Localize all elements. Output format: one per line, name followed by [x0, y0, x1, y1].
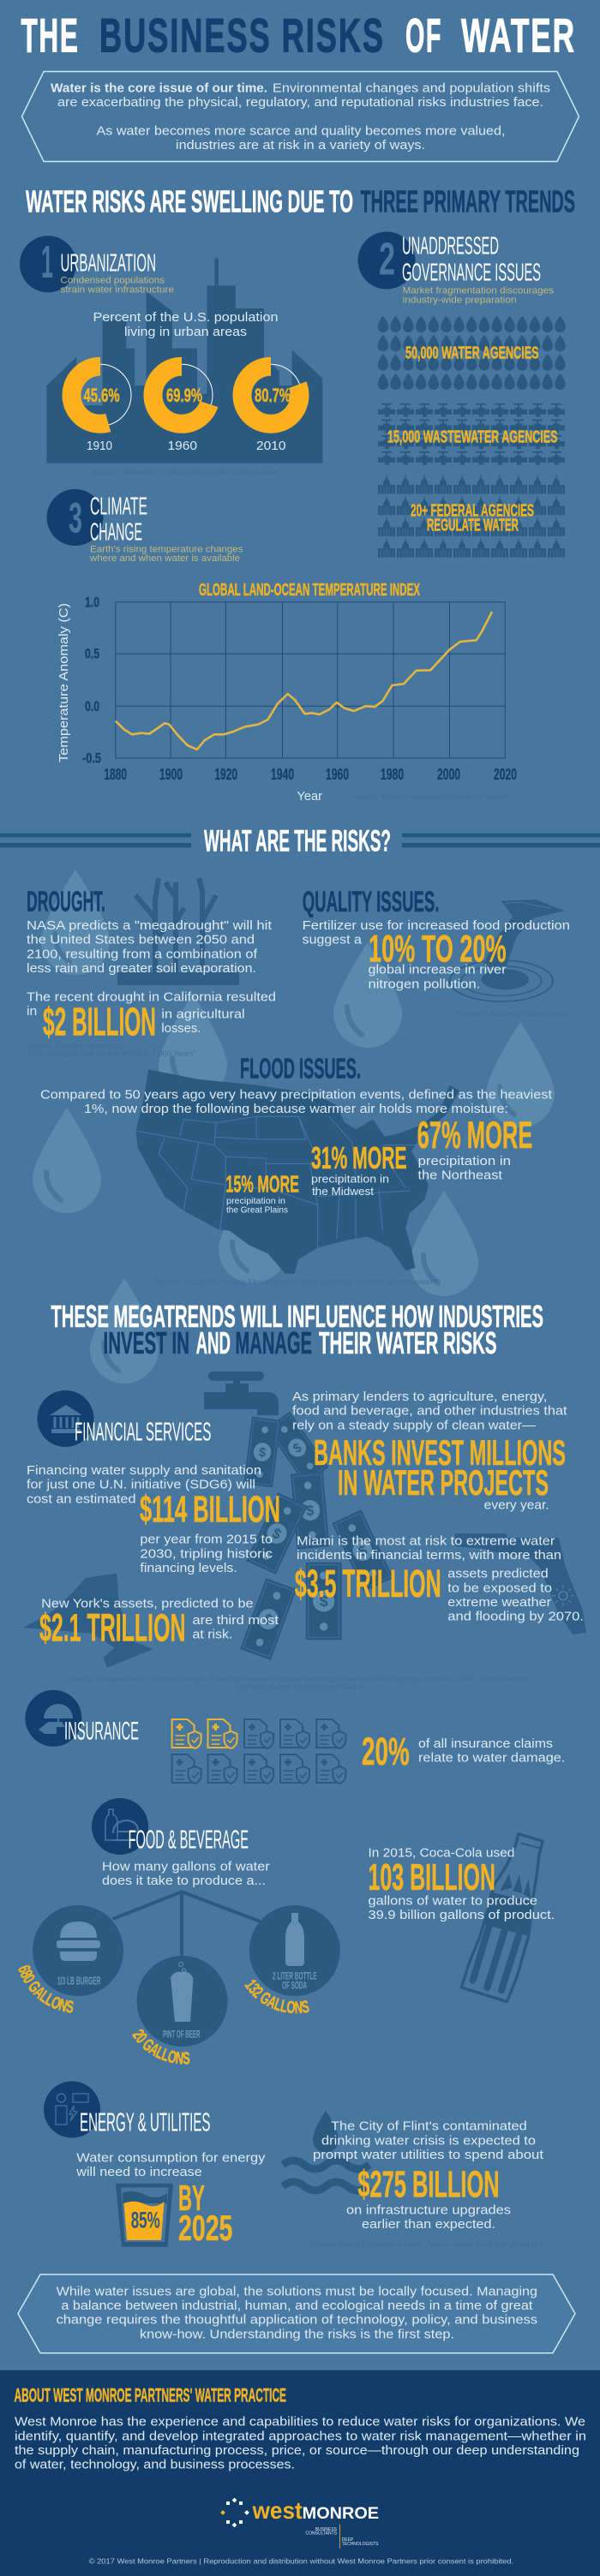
icon: cola bottle	[461, 1834, 543, 2002]
panel: energy and utilities: Water consumption for energy	[76, 2151, 266, 2165]
text: banks invest millions: rely on a steady supply of clean water—	[292, 1419, 537, 1432]
stat: 31% midwest: precipitation in	[311, 1174, 389, 1186]
title: OF	[405, 9, 442, 62]
panel: quality issues: QUALITY ISSUES.	[303, 886, 439, 918]
panel: energy and utilities	[44, 2082, 266, 2179]
chart: global land-ocean temperature index: 1900	[159, 765, 183, 783]
panel: trend 1 urbanization: Condensed populations	[60, 276, 165, 286]
heading: what are the risks: WHAT ARE THE RISKS?	[204, 824, 391, 858]
icon: falling money: $	[356, 1542, 369, 1560]
stat: by 2025	[178, 2178, 232, 2248]
title: BUSINESS RISKS	[99, 9, 385, 62]
panel: drought: in agricultural	[161, 1007, 245, 1021]
text: Miami: Miami is the most at risk to extreme water	[297, 1534, 555, 1548]
icon: faucet	[204, 1372, 279, 1415]
icon: falling money: $	[305, 1502, 315, 1519]
text: Miami: incidents in financial terms, with more than	[297, 1549, 561, 1563]
text: New York: at risk.	[192, 1629, 232, 1642]
stat: 67% northeast: the Northeast	[418, 1169, 502, 1183]
panel: drought: the United States between 2050 and	[27, 934, 255, 947]
icon: falling money: $	[258, 1446, 267, 1461]
heading: three primary trends: WATER RISKS ARE SWELLING DUE TO	[26, 184, 353, 219]
panel: drought: The recent drought in California resulted	[27, 990, 276, 1004]
text: Flint: drinking water crisis is expected to	[321, 2134, 536, 2148]
panel: financial services: FINANCIAL SERVICES	[75, 1418, 211, 1447]
item: soda: 132 GALLONS	[244, 1979, 309, 2013]
stat: 15% great plains	[225, 1171, 299, 1216]
chart: global land-ocean temperature index: 1.0	[85, 594, 99, 610]
connector lines	[113, 1892, 261, 1957]
chart: donut 1960	[151, 364, 213, 453]
panel: financial services: per year from 2015 to	[140, 1533, 273, 1547]
chart: donut 1960: 1960	[168, 439, 197, 453]
chart: global land-ocean temperature index: Temperature Anomaly (C)	[57, 603, 71, 762]
stat: 67% northeast	[417, 1115, 532, 1183]
item: soda: OF SODA	[282, 1980, 307, 1992]
icon: dead trees	[117, 878, 239, 985]
text: Coca-Cola: In 2015, Coca-Cola used	[369, 1846, 514, 1860]
panel: drought: "U.S. Droughts Will Be the Worst in 1,000 Years"	[27, 1049, 196, 1057]
panel: flood issues: Compared to 50 years ago very heavy precipitation events, defined as the heaviest	[40, 1088, 552, 1102]
heading: what are the risks	[0, 824, 600, 858]
chart: donut 1960: 69.9%	[166, 385, 202, 406]
stat: by 2025: 2025	[178, 2208, 232, 2248]
icon: Florida	[455, 1533, 586, 1635]
text: Flint: Source: World Economic Forum, "Water crises are a top global risk"	[309, 2240, 548, 2248]
panel: insurance	[25, 1690, 139, 1747]
text: Flint: prompt water utilities to spend about	[313, 2149, 543, 2162]
text: Flint	[309, 2120, 548, 2248]
panel: trend 2 governance: 2	[379, 234, 395, 285]
source: financial	[67, 1676, 531, 1691]
panel: closing hexagon: change requires the thoughtful application of technology, policy, and business	[57, 2314, 537, 2328]
panel: intro hexagon: As water becomes more scarce and quality becomes more valued,	[96, 124, 506, 138]
panel: financial services: $114 BILLION	[140, 1489, 280, 1530]
text: Miami	[295, 1534, 584, 1624]
heading: megatrends: INVEST IN	[103, 1325, 189, 1360]
panel: financial services	[27, 1390, 280, 1575]
panel: food and beverage heading	[92, 1798, 270, 1888]
text: banks invest millions: As primary lenders to agriculture, energy,	[292, 1390, 547, 1404]
stat: 15% great plains: precipitation in	[226, 1197, 285, 1206]
chart: global land-ocean temperature index: -0.5	[82, 750, 101, 767]
panel: closing hexagon: know-how. Understanding the risks is the first step.	[140, 2328, 454, 2341]
chart: global land-ocean temperature index	[57, 580, 517, 804]
chart: global land-ocean temperature index: 1920	[214, 765, 237, 783]
icon: falling money: $	[270, 1525, 284, 1543]
panel: flood issues: 1%, now drop the following because warmer air holds more moisture:	[84, 1103, 508, 1116]
text: INSURANCE	[64, 1718, 139, 1746]
icon: water drop and waves	[283, 2111, 369, 2190]
icon: falling money: $	[291, 1441, 305, 1456]
text: New York: $2.1 TRILLION	[39, 1606, 186, 1650]
text: Coca-Cola: 39.9 billion gallons of product.	[369, 1909, 555, 1922]
chart: global land-ocean temperature index: 2020	[494, 765, 517, 783]
panel: financial services: Financing water supply and sanitation	[27, 1464, 261, 1478]
title: THE	[21, 9, 79, 62]
text: Flint: on infrastructure upgrades	[346, 2203, 511, 2217]
logo: West Monroe	[220, 2497, 379, 2549]
panel: food and beverage heading: FOOD & BEVERAGE	[129, 1826, 249, 1855]
item: soda	[244, 1905, 340, 2013]
panel: drought: Source: Scientific American,	[27, 1042, 123, 1049]
panel: financial services: cost an estimated	[27, 1492, 135, 1506]
stat: 67% northeast: precipitation in	[418, 1155, 511, 1168]
text: New York: are third most	[192, 1614, 279, 1628]
panel: intro hexagon: are exacerbating the physical, regulatory, and reputational risks industries face.	[57, 96, 543, 110]
panel: trend 2 governance	[358, 231, 555, 305]
icon grid: wastewater agencies	[378, 403, 567, 465]
chart: donut 2010: 80.7%	[255, 385, 291, 406]
icon: falling money: $	[261, 1611, 274, 1629]
item: beer	[132, 1956, 228, 2065]
stat: 31% midwest: the Midwest	[312, 1186, 375, 1198]
text: Flint: earlier than expected.	[362, 2218, 495, 2232]
panel: drought: NASA predicts a "megadrought" will hit	[27, 919, 272, 933]
text: percent of population: living in urban areas	[124, 326, 247, 339]
stat: 20% insurance claims: of all insurance claims	[418, 1737, 553, 1751]
heading: megatrends: MANAGE	[235, 1325, 312, 1360]
chart: donut 1910: 1910	[87, 439, 112, 453]
text: percent of population: Percent of the U.S. population	[93, 311, 278, 325]
panel: flood issues	[40, 1053, 552, 1116]
panel: intro hexagon: Water is the core issue of our time.	[51, 82, 267, 96]
icon grid: water agencies	[378, 316, 567, 391]
panel: food and beverage heading: How many gallons of water	[102, 1860, 270, 1874]
text: Coca-Cola: gallons of water to produce	[369, 1894, 537, 1908]
logo: West Monroe: TECHNOLOGISTS	[342, 2542, 379, 2547]
panel: financial services: financing levels.	[140, 1562, 237, 1575]
heading: megatrends	[51, 1299, 543, 1360]
stat: by 2025: BY	[178, 2178, 205, 2218]
copyright: © 2017 West Monroe Partners | Reproduction and distribution without West Monroe Partners prior consent is prohibited.	[89, 2557, 513, 2566]
panel: quality issues: suggest a	[303, 934, 363, 947]
panel: about West Monroe: identify, quantify, and develop integrated approaches to water risk management—whether in	[15, 2430, 586, 2443]
text: banks invest millions	[292, 1390, 567, 1513]
text: banks invest millions: food and beverage, and other industries that	[292, 1405, 567, 1419]
chart: global land-ocean temperature index: 2000	[437, 765, 460, 783]
item: burger: 680 GALLONS	[19, 1965, 74, 2013]
panel: trend 3 climate: CLIMATE	[90, 493, 147, 520]
panel: about West Monroe: West Monroe has the experience and capabilities to reduce water risks for organizations. We	[15, 2416, 585, 2430]
icon: glass 85%	[116, 2184, 173, 2247]
item: burger	[19, 1905, 123, 2013]
source: financial: and Sustainable Development Goal 6.	[235, 1683, 365, 1691]
panel: quality issues: global increase in river	[369, 964, 507, 977]
text: Miami: to be exposed to	[447, 1581, 552, 1595]
icon: New York	[23, 1574, 153, 1668]
panel: drought: $2 BILLION	[43, 999, 156, 1043]
panel: closing hexagon: a balance between industrial, human, and ecological needs in a time of great	[61, 2299, 532, 2313]
panel: financial services: for just one U.N. initiative (SDG6) will	[27, 1479, 255, 1492]
panel: drought: in	[27, 1005, 37, 1019]
panel: quality issues: nitrogen pollution.	[369, 977, 480, 991]
chart: global land-ocean temperature index: 1960	[326, 765, 349, 783]
text: banks invest millions: every year.	[484, 1499, 549, 1513]
panel: quality issues: Source: UN-Water, "Water Facts"	[457, 1011, 570, 1019]
panel: quality issues	[303, 886, 570, 1019]
chart: global land-ocean temperature index: 1880	[104, 765, 127, 783]
chart: global land-ocean temperature index: 0.0	[85, 698, 99, 714]
icon grid: federal agencies	[378, 475, 567, 558]
chart: global land-ocean temperature index: 1940	[271, 765, 294, 783]
chart: donut 2010: 2010	[256, 439, 286, 453]
panel: trend 2 governance: industry-wide preparation	[403, 295, 517, 305]
icon: falling money: $	[320, 1593, 328, 1610]
panel: closing hexagon	[18, 2274, 575, 2353]
panel: trend 3 climate: where and when water is available	[89, 553, 240, 564]
panel: flood issues: FLOOD ISSUES.	[240, 1053, 361, 1085]
icon: glass 85%: 85%	[131, 2208, 160, 2233]
panel: financial services: 2030, tripling historic	[140, 1547, 273, 1561]
chart: global land-ocean temperature index: Year	[297, 790, 322, 804]
panel: trend 3 climate: Earth's rising temperature changes	[90, 544, 243, 554]
text: New York: New York's assets, predicted to be	[41, 1598, 254, 1611]
text: percent of population	[93, 311, 278, 339]
icon: city skyline	[46, 259, 322, 463]
panel: drought: 2100, resulting from a combination of	[27, 947, 258, 961]
stat: 20% insurance claims: 20%	[362, 1730, 410, 1773]
item: burger: 1/3 LB BURGER	[57, 1975, 100, 1987]
logo: West Monroe: west	[252, 2497, 303, 2524]
panel: trend 1 urbanization	[20, 236, 174, 295]
panel: trend 3 climate: CHANGE	[90, 519, 142, 547]
chart: global land-ocean temperature index: 0.5	[85, 645, 99, 661]
chart: global land-ocean temperature index: 1980	[381, 765, 404, 783]
icon grid: insurance claims	[172, 1719, 345, 1784]
text: Miami: assets predicted	[447, 1568, 549, 1581]
panel: about West Monroe	[0, 2370, 600, 2576]
text: Coca-Cola	[369, 1846, 555, 1922]
background water drops	[33, 870, 555, 1384]
panel: trend 1 urbanization: 1	[41, 236, 53, 288]
heading: megatrends: AND	[196, 1325, 231, 1360]
logo: West Monroe: DEEP	[342, 2537, 354, 2543]
text: Miami: $3.5 TRILLION	[295, 1562, 441, 1605]
panel: intro hexagon: Environmental changes and population shifts	[273, 82, 550, 96]
panel: energy and utilities: will need to increase	[75, 2166, 202, 2179]
item: soda: 2 LITER BOTTLE	[273, 1970, 317, 1982]
chart: global land-ocean temperature index: Source: NASA's Goddard Institute for Space	[352, 793, 508, 801]
chart: donut 1910	[69, 364, 131, 453]
panel: trend 3 climate	[46, 489, 243, 564]
panel: about West Monroe: the supply chain, manufacturing process, price, or source—through our deep understanding	[15, 2444, 579, 2458]
panel: closing hexagon: While water issues are global, the solutions must be locally focused. Managing	[57, 2285, 537, 2298]
map: United States	[135, 1069, 459, 1274]
panel: drought: DROUGHT.	[27, 886, 105, 917]
item: beer: PINT OF BEER	[163, 2028, 201, 2040]
panel: energy and utilities: ENERGY & UTILITIES	[80, 2108, 211, 2137]
chart: donut 1910: 45.6%	[84, 385, 120, 406]
panel: trend 2 governance: Market fragmentation discourages	[403, 286, 555, 296]
stat: 15% great plains: 15% MORE	[225, 1171, 299, 1198]
text: Flint: $275 BILLION	[357, 2164, 500, 2205]
panel: intro hexagon: industries are at risk in a variety of ways.	[176, 139, 425, 152]
panel: about West Monroe: of water, technology, and business processes.	[15, 2459, 295, 2472]
icon grid: federal agencies: REGULATE WATER	[427, 515, 519, 535]
panel: intro hexagon	[22, 72, 579, 161]
panel: drought: losses.	[161, 1022, 201, 1036]
icon: polluted pipe	[450, 900, 564, 1001]
text: Coca-Cola: 103 BILLION	[369, 1857, 495, 1898]
logo: West Monroe: MONROE	[303, 2505, 379, 2523]
logo: West Monroe: CONSULTANTS	[306, 2531, 338, 2537]
panel: drought	[27, 886, 276, 1057]
item: beer: 20 GALLONS	[132, 2029, 190, 2065]
panel: trend 1 urbanization: strain water infrastructure	[60, 284, 174, 295]
icon: falling money	[240, 1412, 393, 1660]
chart: donut 2010	[240, 364, 302, 453]
stat: 20% insurance claims	[362, 1730, 565, 1773]
text: Miami: and flooding by 2070.	[447, 1611, 584, 1624]
panel: food and beverage heading: does it take to produce a...	[102, 1874, 266, 1888]
panel: trend 2 governance: UNADDRESSED	[402, 233, 499, 260]
stat: 20% insurance claims: relate to water damage.	[418, 1752, 565, 1766]
text: Flint: The City of Flint's contaminated	[331, 2120, 527, 2134]
chart: global land-ocean temperature index: GLOBAL LAND-OCEAN TEMPERATURE INDEX	[199, 580, 420, 600]
logo: West Monroe: BUSINESS	[315, 2527, 338, 2532]
source: financial: Source: Independent, "Climate change: Flooding caused by global warming to put one billion people at risk by 2060, charity warns"	[67, 1676, 531, 1683]
panel: trend 3 climate: 3	[69, 494, 82, 542]
panel: trend 1 urbanization: URBANIZATION	[60, 250, 156, 278]
text: Miami: extreme weather	[447, 1596, 551, 1610]
panel: quality issues: Fertilizer use for increased food production	[303, 919, 570, 933]
stat: 31% midwest	[311, 1140, 407, 1198]
stat: 15% great plains: the Great Plains	[226, 1206, 288, 1216]
panel: about West Monroe: ABOUT WEST MONROE PARTNERS' WATER PRACTICE	[14, 2384, 286, 2406]
panel: quality issues: 10% TO 20%	[369, 928, 507, 970]
source: urbanization: Source: Wikipedia, "Urbanization in the United States"	[92, 469, 280, 476]
stat: 31% midwest: 31% MORE	[311, 1140, 407, 1175]
panel: drought: less rain and greater soil evaporation.	[27, 962, 256, 976]
source: flooding: Source: UCSUSA, "Heavy Flooding and Global Warming: Is There a Connection?"	[155, 1278, 440, 1286]
